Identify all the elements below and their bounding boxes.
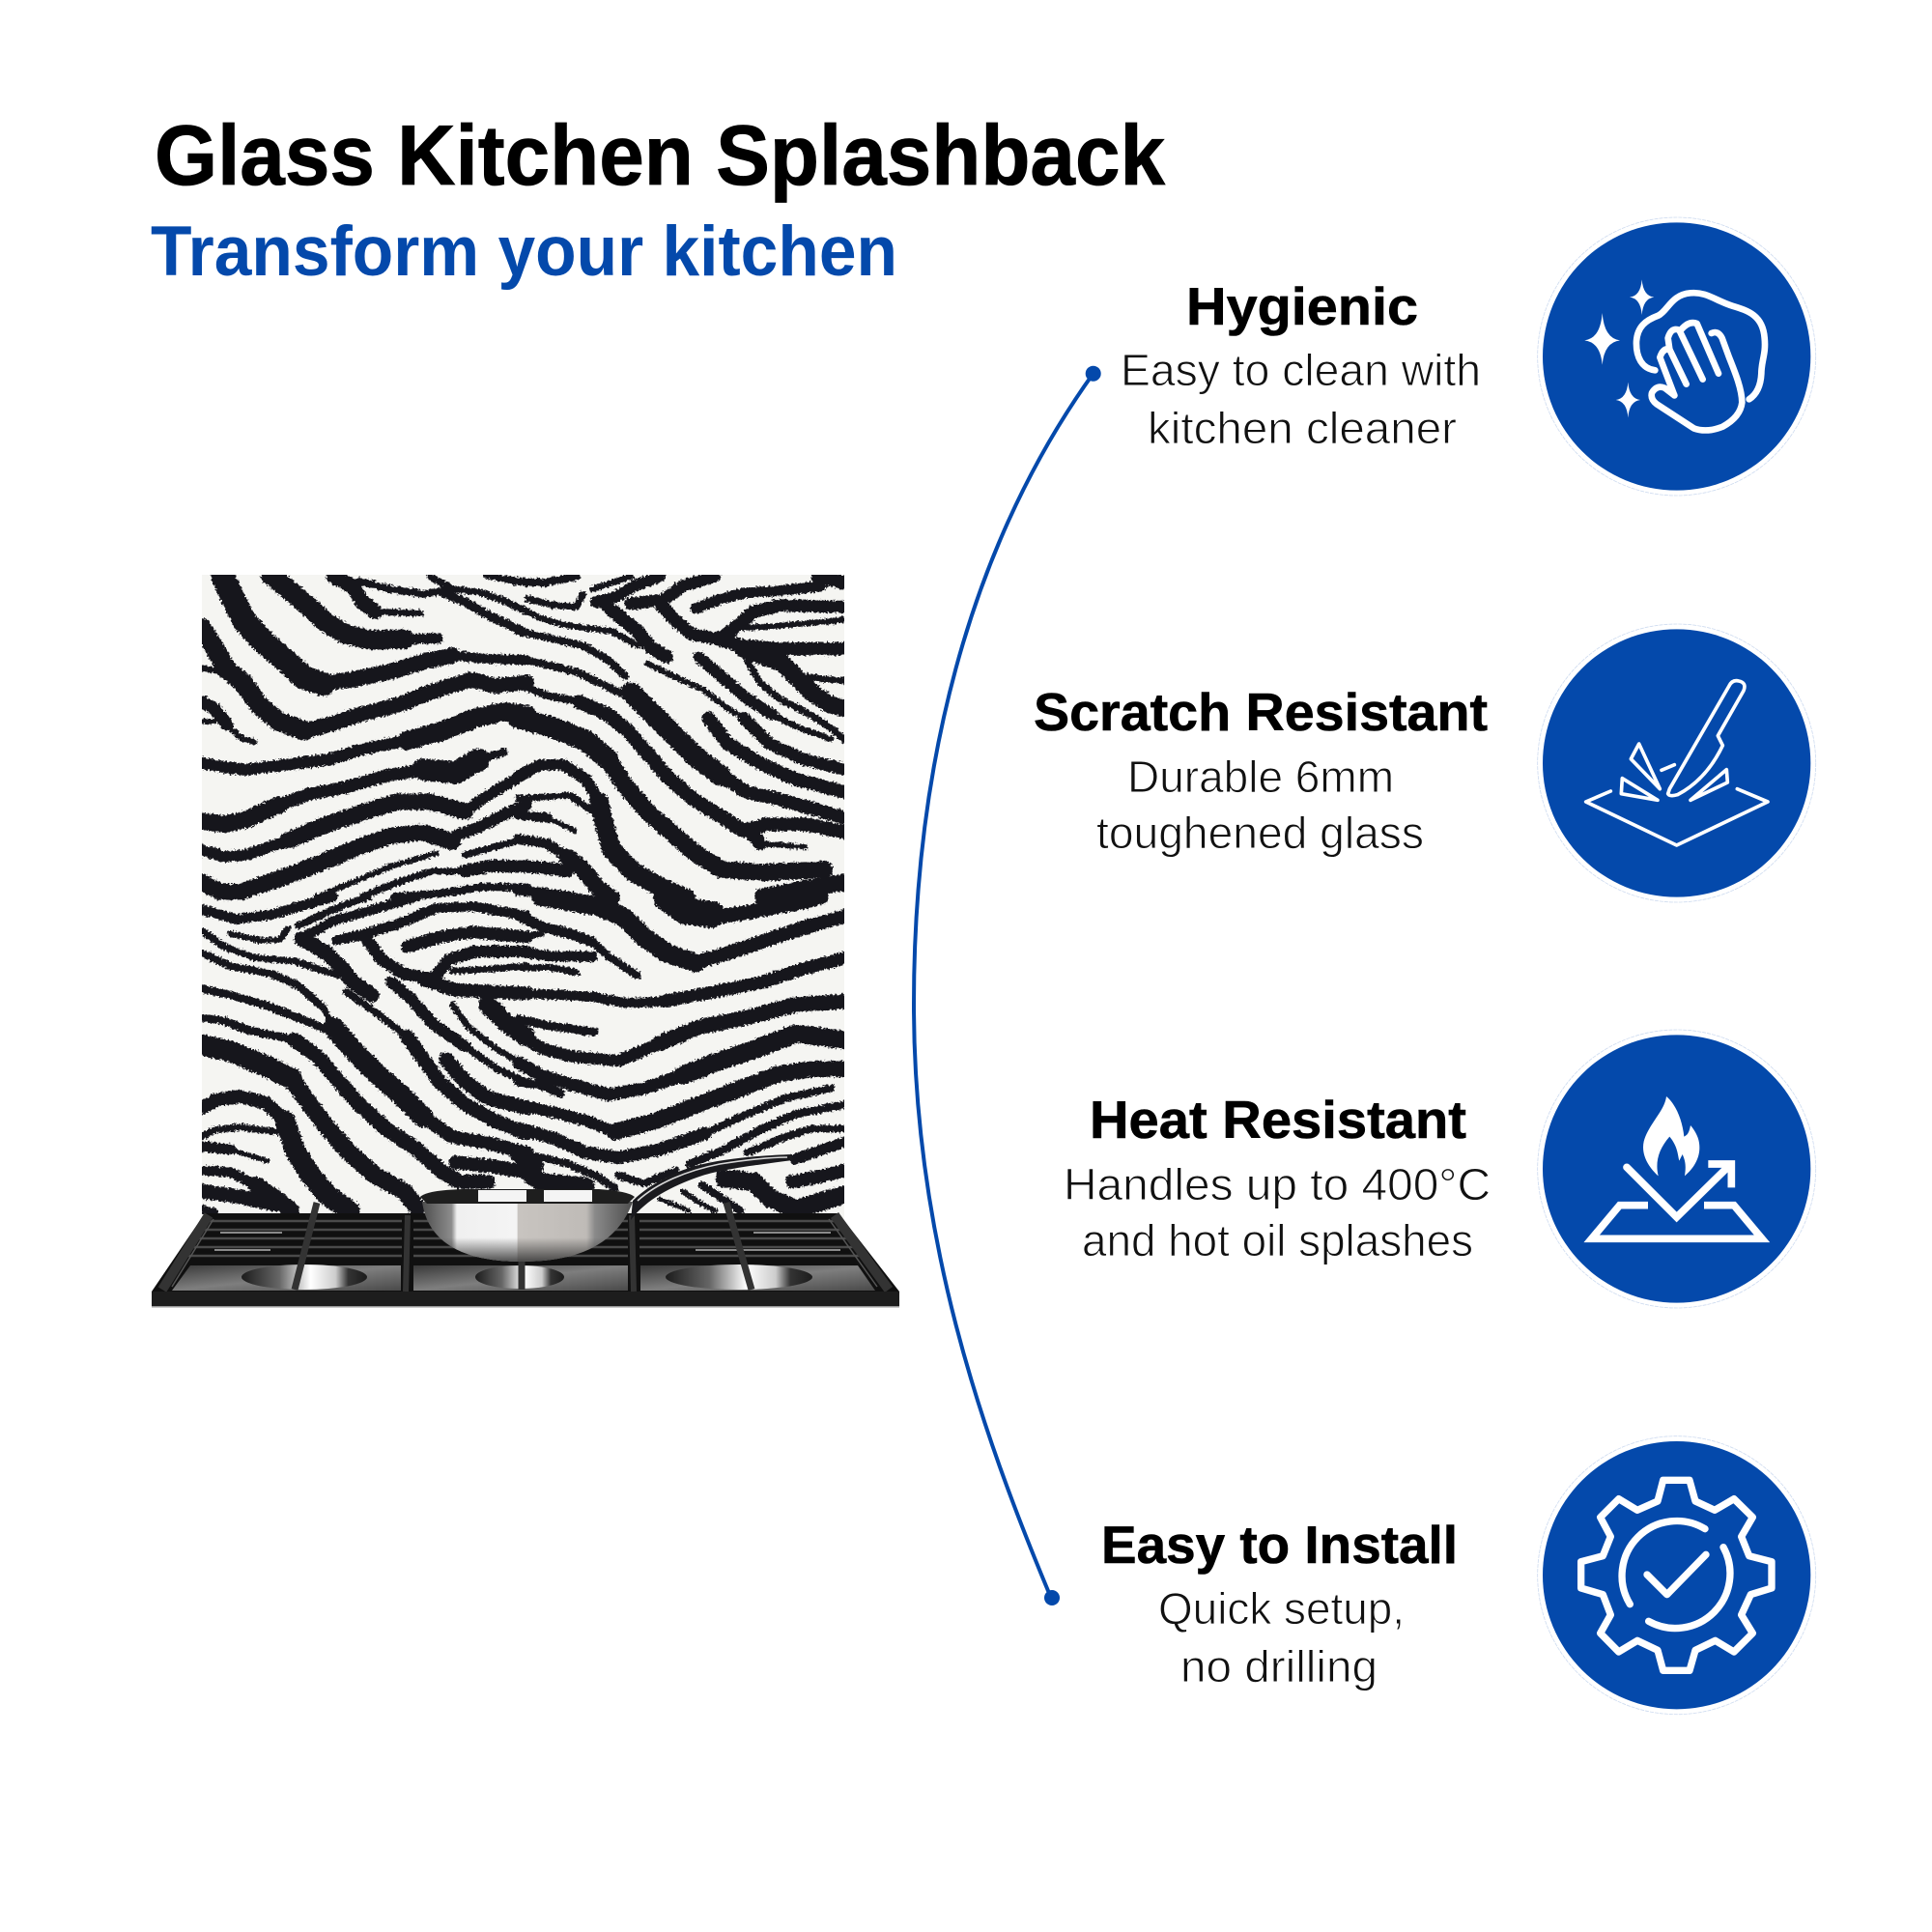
title: Glass Kitchen Splashback [155, 107, 1166, 203]
icon: knife scratching glass [1538, 624, 1816, 902]
heading: Hygienic: Hygienic [1186, 276, 1418, 336]
icon: gear with check mark [1538, 1436, 1816, 1715]
heading: Heat Resistant: Heat Resistant [1090, 1090, 1466, 1150]
gas cooktop [152, 1203, 899, 1308]
frying pan [420, 1154, 793, 1262]
feature: Scratch Resistant [1034, 682, 1488, 858]
description: Easy to Install: Quick setup, [1158, 1583, 1405, 1634]
feature: Hygienic: kitchen cleaner [1148, 403, 1457, 453]
subtitle: Transform your kitchen [151, 213, 897, 291]
feature: Scratch Resistant: toughened glass [1096, 808, 1424, 858]
description: Hygienic: Easy to clean with [1121, 345, 1481, 395]
connector curve with end dots [914, 366, 1101, 1605]
heading: Easy to Install: Easy to Install [1101, 1515, 1458, 1575]
description: Scratch Resistant: Durable 6mm [1127, 752, 1394, 802]
icon: flame over glass [1538, 1030, 1816, 1308]
description: Heat Resistant: Handles up to 400°C [1064, 1159, 1491, 1209]
icon: hand wiping with sparkles [1538, 217, 1816, 496]
feature: Heat Resistant: and hot oil splashes [1082, 1215, 1473, 1265]
heading: Scratch Resistant: Scratch Resistant [1034, 682, 1488, 742]
feature: Hygienic [1121, 276, 1481, 453]
panel: zebra glass splashback [202, 575, 845, 1218]
feature: Heat Resistant [1064, 1090, 1491, 1265]
product image: zebra splashback on cooktop [152, 575, 899, 1308]
feature: Easy to Install: no drilling [1180, 1641, 1378, 1691]
feature: Easy to Install [1101, 1515, 1458, 1691]
